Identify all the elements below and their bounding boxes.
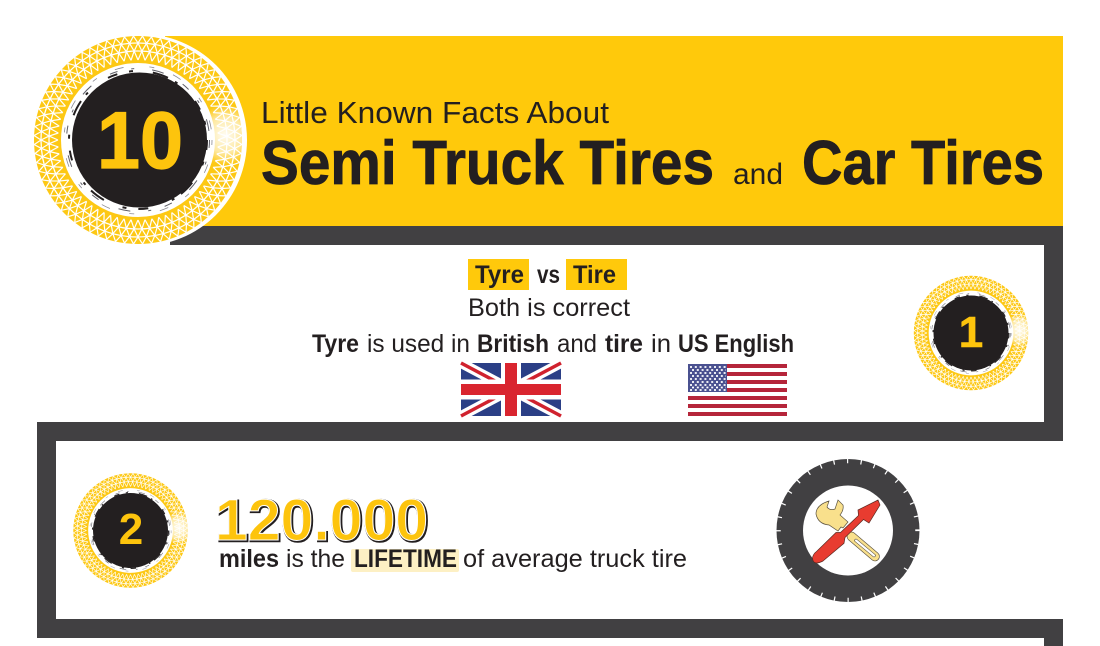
icon: tire with tools bbox=[776, 459, 920, 602]
header banner bbox=[165, 36, 1063, 226]
fact 2: big number 120.000: 120.000 bbox=[216, 489, 429, 554]
title: Little Known Facts About bbox=[261, 95, 609, 130]
fact 1: tyre vs tire text: Both is correct bbox=[468, 294, 630, 322]
badge: number 2: 2 bbox=[119, 505, 143, 554]
fact 1: tyre vs tire text: US English bbox=[678, 330, 794, 358]
screwdriver bbox=[812, 500, 880, 563]
fact 2: lifetime text: miles bbox=[219, 545, 279, 573]
fact 2: lifetime text: LIFETIME bbox=[354, 545, 457, 573]
title: and bbox=[733, 158, 783, 191]
fact 1: tyre vs tire text: Tire bbox=[573, 261, 616, 289]
fact 1: tyre vs tire text: Tyre bbox=[312, 330, 359, 358]
fact 1: tyre vs tire text: is used in bbox=[367, 330, 470, 358]
badge: number 1: 1 bbox=[959, 308, 983, 357]
main badge: tire tread with number 10: 10 bbox=[97, 96, 183, 186]
wrench bbox=[816, 500, 848, 531]
fact 1: tyre vs tire text: tire bbox=[605, 330, 643, 358]
fact 2: big number 120.000: 120.000 bbox=[215, 488, 428, 553]
main badge: tire tread with number 10 bbox=[22, 24, 255, 256]
fact 2: lifetime text: of average truck tire bbox=[463, 545, 687, 573]
title bbox=[261, 95, 1044, 198]
fact 1: tyre vs tire text: vs bbox=[537, 261, 560, 289]
frame: winding dark road bbox=[37, 226, 1063, 646]
fact 1: tyre vs tire text: Tyre bbox=[475, 261, 524, 289]
fact 1: tyre vs tire text: and bbox=[557, 330, 597, 358]
title: Car Tires bbox=[802, 129, 1044, 198]
title: Semi Truck Tires bbox=[261, 129, 714, 198]
fact 1: tyre vs tire text: British bbox=[477, 330, 549, 358]
fact 2: lifetime text: is the bbox=[286, 545, 345, 573]
fact 2: lifetime text bbox=[219, 545, 687, 573]
badge: number 1 bbox=[907, 269, 1035, 397]
icon: UK flag bbox=[461, 363, 561, 416]
fact 1: tyre vs tire text bbox=[312, 259, 794, 358]
icon: US flag bbox=[688, 364, 787, 416]
badge: number 2 bbox=[67, 467, 195, 594]
fact 1: tyre vs tire text: in bbox=[651, 330, 671, 358]
